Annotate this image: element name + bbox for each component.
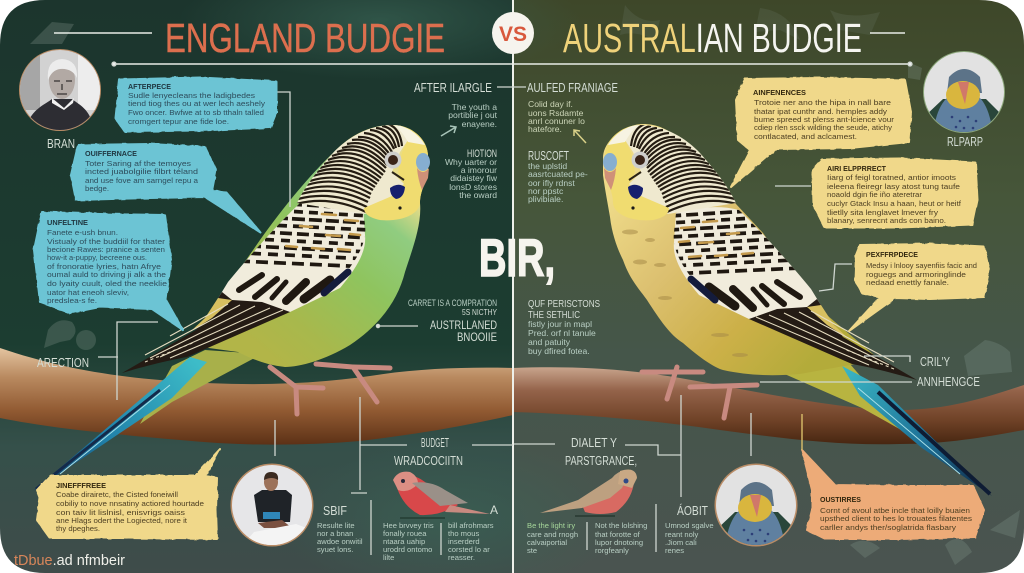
column: green notes: ste [527,546,537,555]
vs badge: VS [499,23,527,46]
text block: centre-left lower: BNOOIIE [457,330,497,344]
column: Sbif: Resulte lite [317,521,355,530]
head [603,124,737,220]
text block: centre-left top [414,81,498,200]
text block: centre-left lower: CARRET IS A COMPRATION [408,298,497,308]
column: Sbif: syuet lons. [317,545,353,554]
title rules [54,33,912,66]
panel: blue callout 1: cromgert tepur ane fide loe. [128,117,229,126]
panel: yellow callout middle right: noaold dgin fie iño ateretrar [827,190,923,199]
label: Budget Wradcocitn: BUDGET [421,435,449,450]
panel: yellow callout bottom left [37,449,220,539]
text block: centre-right top [527,81,618,204]
panel: yellow callout top right [731,78,911,187]
text block: centre-right top: nor ppstc [528,186,564,196]
panel: blue callout 3 [34,212,183,330]
small bird: tan [540,470,637,516]
panel: yellow callout lower right [849,244,989,331]
text block: centre-left lower: 5S NICTHY [462,308,498,317]
panel: blue callout 1: Sudle lenyecleans the ladigbedes [128,91,255,100]
label: Dialet y Parstgrance: DIALET Y [571,435,617,450]
panel: yellow callout top right: Trotoie ner ano the hipa in nall bare [754,98,891,107]
panel: blue callout 3: becione Rawes: pranice a senten [47,245,165,254]
panel: yellow callout middle right [813,159,977,227]
panel: blue callout 3: UNFELTINE [47,218,88,227]
small bird: red [393,472,490,518]
text block: centre-right lower: THE SETHLIC [528,310,580,321]
column: Aobit: .Jiom cali [665,538,697,547]
label: Bran: BRAN [47,136,75,151]
column: right notes 2 [595,521,647,555]
portrait: Bran [19,49,102,134]
label: Dialet y Parstgrance [565,435,637,468]
column: green notes: care and rnogh [527,530,578,539]
chest mottling [622,230,748,357]
panel: yellow callout top right: bume spreed st plerss ant-lcience vour [754,115,895,124]
text block: centre-left top: The youth a [452,102,497,112]
connector lines [98,87,912,555]
text block: centre-right lower: QUF PERISCTONS [528,299,600,310]
panel: blue callout 3: do lyaity cuult, oled the neeklie [47,279,167,288]
column: Sbif: nor a bnan [317,529,353,538]
panel: yellow callout lower right: nedaad enettly fanale. [866,278,949,287]
head [296,124,430,220]
wing [122,200,370,373]
column: green notes: calvaiportial [527,538,567,547]
panel: yellow callout bottom left: Coabe dirairetc, the Cisted foneiwill [56,490,178,499]
feet [270,364,390,414]
panel: blue callout 1: Fwo oncer. Bwfwe at to sb tthaln talled [128,108,264,117]
label: Rlparp: RLPARP [947,134,983,149]
label: Cril'y Annhengce: CRIL'Y [920,355,951,369]
column: Aobit: Umnod sgalve [665,521,714,530]
text block: centre-right top: oor ifly rdnst [528,178,575,188]
panel: orange callout bottom right: upsthed client to hes lo trouates filatentes [820,514,972,523]
label: Budget Wradcocitn [394,435,463,468]
column: bird notes 1: urodrd ontomo [383,545,432,554]
column: green notes [527,521,578,555]
column: bird notes 2: corsted lo ar [448,545,490,554]
text block: centre-right lower: fistly jour in mapl [528,319,592,329]
panel: blue callout 3: uator hat eneoh sleviv, [47,288,129,297]
text block: centre-right lower: Pred. orf nl tanule [528,328,596,338]
text block: centre-left top: portiblie j out [448,110,498,120]
panel: yellow callout lower right: Medsy i lnlooy sayenfiis facic and [866,261,977,270]
panel: blue callout 3: of fronoratie lyries, hatn Afrye [47,262,161,271]
panel: yellow callout middle right: ieleena fleiregr lasy atost tung taufe [827,182,960,191]
panel: blue callout 3: Fanete e-ush bnun. [47,228,118,237]
title: Australian Budgie: AUSTRALIAN BUDGIE [563,15,862,61]
text block: centre-right top: the uplstid [528,161,567,171]
panel: blue callout 1: AFTERPECE [128,82,171,91]
column: bird notes 1: Hee brvvey tris [383,521,434,530]
panel: yellow callout middle right: Iiarg of feigl toratned, antior imoots [827,173,956,182]
column: right notes 2: that forotte of [595,530,641,539]
column: bird notes 1 [383,521,434,562]
panel: blue callout 3: Vistualy of the buddiil for thater [47,237,166,246]
column: right notes 2: rorgfeanly [595,546,629,555]
panel: yellow callout top right: cdiep rlen ssck wilding the seude, atichy [754,123,892,132]
body [603,124,880,375]
panel: orange callout bottom right: carller andys ther/soglatrida flasbary [820,523,956,532]
label: Arection: ARECTION [37,355,89,370]
panel: yellow callout bottom left: ane Hlags odert the Logiected, nore it [56,516,187,525]
bird: England budgie (left) [33,124,430,491]
text block: centre-right lower [528,299,600,356]
column: bird notes 2: reasser. [448,553,475,562]
text block: centre-right top: Colid day if. [528,99,573,109]
panel: blue callout 3: oumal auld to driving ji alk a the [47,270,166,279]
panel: blue callout 3: predslea-s fe. [47,296,97,305]
label: Cril'y Annhengce: ANNHENGCE [917,375,980,389]
column: Aobit [665,503,714,555]
column: Aobit: renes [665,546,684,555]
column: green notes: Be the light iry [527,521,575,530]
column: right notes 2: lupor dnotoing [595,538,643,547]
text block: centre-left lower [408,298,498,344]
branch: left [0,348,513,445]
text block: centre-right top: aasrtcuated pe- [528,169,588,179]
text block: centre-right lower: buy dfired fotea. [528,346,590,356]
tail [780,364,992,496]
column: Sbif: awdoe onwitil [317,537,363,546]
panel: blue callout 2: incted juabolgilie filbrt téland [85,167,198,176]
panel: blue callout 2: and use fove am sarngel repu a [85,176,199,185]
panel: yellow callout top right: AINFENENCES [753,88,806,97]
wing [669,207,917,380]
panel: yellow callout lower right: roguegs and armoringlinde [866,270,966,279]
panel: yellow callout lower right: PEXFFRPDECE [866,250,918,259]
column: bird notes 2: bill afrohmars [448,521,494,530]
panel: yellow callout middle right: cuclyr Gtack Insu a haan, heut or heitf [827,199,962,208]
text block: centre-left top: the oward [459,190,497,200]
text block: centre-right lower: and patuity [528,337,571,347]
column: bird notes 1: fonally rouea [383,529,427,538]
text block: centre-right top: uons Rsdamte [528,108,584,118]
panel: yellow callout bottom left: con taiv lit lislnisl, enisvrigs oaiss [56,508,185,517]
panel: orange callout bottom right: Cornt of avoul atbe incle that loilly buaien [820,506,970,515]
column: Aobit: reant noly [665,530,699,539]
panel: yellow callout middle right: blanary, senrecnt ands con baino. [827,216,946,225]
panel: blue callout 1 [116,78,276,131]
body [187,125,428,367]
text block: centre-left lower: AUSTRLLANED [430,318,497,332]
column: bird notes 2 [448,503,498,562]
text block: centre-left top: lonsD stores [449,182,497,192]
label: Budget Wradcocitn: WRADCOCIITN [394,453,463,468]
column: bird notes 1: lilte [383,553,394,562]
panel: yellow callout bottom left: cobiliy to nove nnsatiny actiored hourtade [56,499,204,508]
text block: centre-left top: AFTER ILARGLE [414,81,492,95]
title: England Budgie: ENGLAND BUDGIE [165,15,445,61]
label: Cril'y Annhengce [917,355,980,389]
text block: centre-right top: anrl conuner lo [528,116,585,126]
portrait: Rlparp parrot [923,51,1005,135]
text block: centre-right top: plivibiale. [528,194,563,204]
column: bird notes 1: ntaara uahip [383,537,425,546]
panel: orange callout bottom right [802,414,984,539]
panel: blue callout 2: OUIFFERNACE [85,149,137,158]
panel: yellow callout top right: contlacated, and aclcamest. [754,132,857,141]
panel: blue callout 2: Toter Saring af the temoyes [85,159,191,168]
panel: yellow callout middle right: AIRI ELPPRRECT [827,164,886,173]
column: bird notes 2: tho mous [448,529,479,538]
label: Dialet y Parstgrance: PARSTGRANCE, [565,453,637,468]
text block: centre-left top: HIOTION [467,148,497,160]
centre word BIR: BIR, [479,229,555,288]
center divider line [512,0,514,573]
column: Sbif [317,503,363,554]
vs badge [492,12,534,54]
text block: centre-right top: hatefore. [528,124,562,134]
text block: centre-left top: Why uarter or [445,157,497,167]
bird: Australian budgie (right) [603,124,992,496]
column: Sbif: SBIF [323,503,347,518]
branch: right [513,367,1024,444]
panel: yellow callout bottom left: JINEFFFREEE [56,481,106,490]
tail [33,350,262,491]
panel: yellow callout bottom left: thy dpeghes. [56,524,100,533]
text block: centre-right top: RUSCOFT [528,148,569,163]
panel: blue callout 1: tiend tiog thes ou at wer lech aeshely [128,99,265,108]
panel: orange callout bottom right: OUSTIRRES [820,495,861,504]
column: right notes 2: Not the lolshing [595,521,647,530]
panel: blue callout 2: bedge. [85,184,109,193]
text block: centre-right top: AULFED FRANIAGE [527,81,618,95]
column: bird notes 2: A [490,503,498,517]
icon-adjacent portrait: Sbif [230,464,314,548]
column: Aobit: ÁOBIT [677,503,708,518]
text block: centre-left top: enayene. [462,119,497,129]
header rule [114,63,910,65]
text block: centre-left top: didaistey fiw [450,173,498,183]
panel: blue callout 2 [71,144,261,233]
panel: yellow callout middle right: tlietlly sita lenglavet lmever fry [827,208,938,217]
portrait: parrot bottom [714,464,798,548]
text block: centre-left top: a imorour [461,165,497,175]
feet [642,367,757,418]
panel: yellow callout top right: thatar ipat cunthr and. hemples addy [754,107,887,116]
panel: blue callout 3: how-it a-puppy, becreene ous. [47,253,147,262]
column: bird notes 2: inserderd [448,537,480,546]
footer brand: tDbue.ad nfmbeir [14,552,125,569]
